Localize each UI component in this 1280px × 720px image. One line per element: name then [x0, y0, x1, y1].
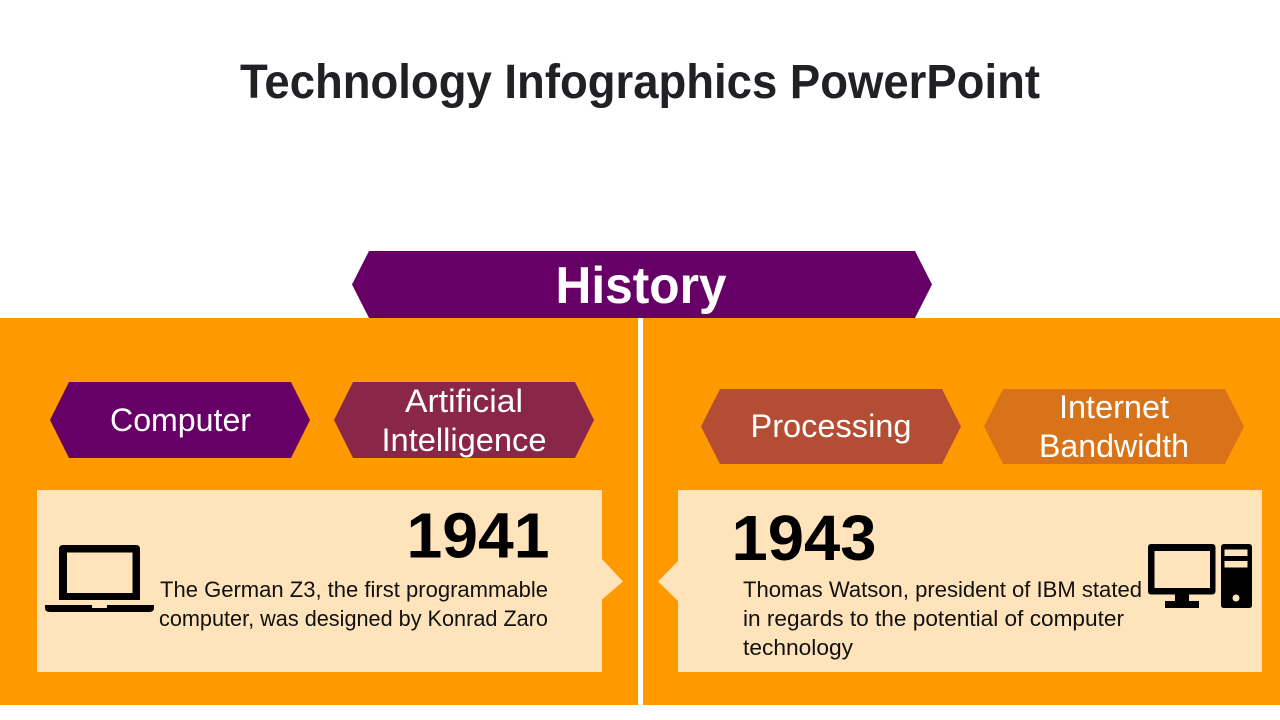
- hexagon label: Computer: [50, 382, 310, 458]
- description: German Z3: [159, 577, 548, 631]
- hexagon label: Processing: Processing: [750, 408, 912, 444]
- panel: left orange background: [0, 318, 638, 705]
- description: Thomas Watson: [743, 577, 1142, 660]
- heading banner: History: History: [556, 257, 727, 315]
- description: Thomas Watson: in regards to the potential of computer: [743, 606, 1124, 631]
- year: 1943: 1943: [732, 502, 876, 574]
- hexagon label: Processing: [701, 389, 961, 464]
- hexagon label: Internet Bandwidth: Bandwidth: [1039, 428, 1189, 464]
- description: Thomas Watson: technology: [743, 635, 853, 660]
- hexagon label: Internet Bandwidth: [984, 389, 1244, 464]
- hexagon label: Artificial Intelligence: [334, 382, 594, 458]
- callout: 1941: [37, 490, 623, 672]
- hexagon label: Internet Bandwidth: Internet: [1059, 389, 1169, 425]
- description: German Z3: The German Z3, the first programmable: [160, 577, 548, 602]
- panel: right orange background: [643, 318, 1280, 705]
- description: Thomas Watson: Thomas Watson, president of IBM stated: [743, 577, 1142, 602]
- icon: desktop computer: [1148, 544, 1252, 608]
- heading banner: History: [352, 251, 932, 318]
- year: 1941: 1941: [406, 500, 550, 572]
- hexagon label: Computer: Computer: [110, 402, 251, 438]
- icon: laptop: [45, 545, 154, 612]
- title: Technology Infographics PowerPoint: [240, 56, 1040, 109]
- callout: 1943: [658, 490, 1262, 672]
- description: German Z3: computer, was designed by Konrad Zaro: [159, 606, 548, 631]
- hexagon label: Artificial Intelligence: Artificial: [405, 383, 523, 419]
- hexagon label: Artificial Intelligence: Intelligence: [382, 422, 546, 458]
